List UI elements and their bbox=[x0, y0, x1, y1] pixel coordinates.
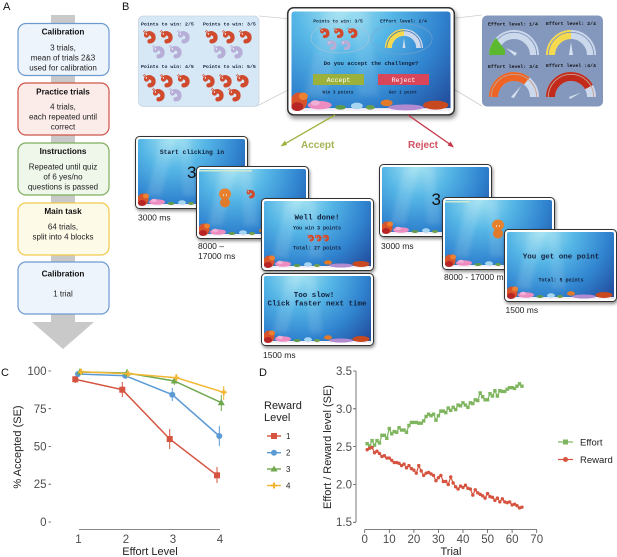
screen: well done: Well done! bbox=[294, 214, 340, 222]
box: calibration: mean of trials 2&3 bbox=[31, 54, 96, 62]
screen: start clicking: Start clicking in bbox=[160, 149, 224, 156]
x tick labels: 60 bbox=[506, 534, 518, 546]
effort series bbox=[367, 384, 522, 446]
panel label B: B bbox=[122, 1, 129, 13]
timing label: 3000 ms bbox=[381, 241, 414, 251]
legend: reward level: Level bbox=[264, 412, 290, 424]
x tick labels: 4 bbox=[217, 534, 224, 546]
highlighted gauge bbox=[371, 24, 432, 54]
y tick labels: 50 bbox=[34, 442, 46, 454]
panel: effort level gauges: Effort level: 2/4 bbox=[546, 21, 596, 27]
screen: countdown bbox=[380, 164, 492, 236]
screen: well done bbox=[262, 198, 374, 270]
x tick labels: 30 bbox=[432, 534, 445, 546]
box: instructions bbox=[18, 143, 109, 195]
panel: points to win options: Points to win: 3/5 bbox=[203, 22, 256, 28]
box: instructions: Repeated until quiz bbox=[29, 162, 97, 172]
y tick labels bbox=[336, 366, 352, 529]
accept arrow bbox=[280, 115, 335, 146]
x tick labels: 1 bbox=[75, 534, 82, 546]
series 4 yellow bbox=[78, 369, 227, 400]
gauge 4 bbox=[548, 74, 594, 99]
screen: well done: You win 3 points bbox=[293, 226, 341, 232]
chart C: percent accepted bbox=[12, 366, 302, 557]
x tick labels: 0 bbox=[361, 534, 368, 546]
x tick labels: 70 bbox=[530, 534, 543, 546]
x tick labels bbox=[361, 534, 543, 546]
purple shrimp icons bbox=[152, 30, 240, 99]
accept button bbox=[313, 74, 364, 85]
timing label: 8000 - 17000 ms bbox=[444, 272, 508, 282]
screen: clicking bbox=[196, 166, 308, 238]
panel: points to win options: Points to win: 5/5 bbox=[203, 64, 256, 70]
accept sequence bbox=[136, 136, 374, 360]
timing label bbox=[198, 241, 235, 261]
y axis title: % Accepted (SE) bbox=[12, 405, 24, 489]
zoom connector lines bbox=[257, 15, 482, 106]
y tick labels: 25 bbox=[34, 479, 46, 491]
timing label: 3000 ms bbox=[138, 212, 171, 222]
legend: reward level: 2 bbox=[286, 448, 291, 458]
axes bbox=[48, 371, 220, 530]
red shrimp icons bbox=[143, 30, 250, 99]
box: calibration: used for calibration bbox=[29, 64, 97, 72]
flow arrow bbox=[32, 15, 94, 349]
box: main task: Main task bbox=[44, 207, 82, 216]
panel label A: A bbox=[3, 1, 11, 13]
x tick labels: 20 bbox=[408, 534, 420, 546]
y tick labels: 3.0 bbox=[336, 404, 352, 416]
y tick labels: 0 bbox=[40, 517, 46, 529]
legend: effort and reward bbox=[558, 438, 613, 466]
panel A: flow chart bbox=[18, 15, 109, 349]
box: calibration: 3 trials, bbox=[50, 44, 76, 52]
series 3 green bbox=[76, 368, 225, 411]
x tick labels: 10 bbox=[383, 534, 396, 546]
box: main task: 64 trials, bbox=[48, 222, 78, 232]
chart D: effort and reward by trial bbox=[322, 366, 613, 557]
main decision screen: Effort level: 2/4 bbox=[380, 18, 427, 24]
screen: well done: Total: 27 points bbox=[293, 246, 341, 252]
main decision screen: Get 1 point bbox=[389, 90, 418, 96]
panel label C: C bbox=[1, 367, 9, 379]
screen: waiting bbox=[442, 198, 554, 270]
reject button bbox=[378, 74, 429, 85]
panel: effort level gauges bbox=[482, 16, 603, 106]
accept button: Accept bbox=[327, 77, 350, 84]
y tick labels: 75 bbox=[34, 404, 46, 416]
box: practice trials bbox=[18, 83, 109, 135]
screen: too slow bbox=[262, 274, 374, 346]
box: practice trials: each repeated until bbox=[29, 112, 97, 122]
y tick labels: 2.0 bbox=[336, 480, 352, 492]
y tick labels bbox=[27, 366, 46, 529]
series 2 blue bbox=[75, 371, 222, 446]
box: instructions: questions is passed bbox=[28, 182, 98, 192]
panel: effort level gauges: Effort level :4/4 bbox=[546, 63, 596, 69]
legend: effort and reward: Effort bbox=[580, 438, 603, 448]
box: final calibration: Calibration bbox=[42, 270, 84, 278]
box: instructions: Instructions bbox=[40, 147, 87, 156]
accept label: Accept bbox=[301, 140, 335, 151]
screen: start clicking: 3 bbox=[187, 163, 196, 182]
screen: countdown: 3 bbox=[432, 190, 441, 209]
y tick labels: 1.5 bbox=[336, 517, 352, 529]
box: instructions: of 6 yes/no bbox=[43, 172, 83, 182]
x tick labels bbox=[75, 534, 224, 546]
screen: too slow: Too slow! bbox=[294, 292, 334, 300]
box: final calibration bbox=[18, 262, 109, 314]
screen: too slow: Click faster next time bbox=[267, 300, 367, 308]
legend: reward level bbox=[264, 400, 302, 490]
legend: reward level: 4 bbox=[286, 482, 291, 490]
legend: reward level: 1 bbox=[286, 432, 291, 441]
panel: points to win options bbox=[138, 16, 259, 106]
box: calibration: Calibration bbox=[42, 28, 84, 36]
screen: start clicking bbox=[136, 136, 248, 208]
reject button: Reject bbox=[392, 77, 415, 84]
x tick labels: 2 bbox=[123, 534, 129, 546]
panel: effort level gauges: Effort level: 1/4 bbox=[488, 22, 538, 28]
panel: points to win options: Points to win: 4/5 bbox=[141, 64, 194, 70]
box: final calibration: 1 trial bbox=[53, 290, 73, 298]
legend: effort and reward: Reward bbox=[580, 455, 613, 466]
reject label: Reject bbox=[408, 140, 439, 151]
x tick labels: 3 bbox=[170, 534, 176, 546]
main decision screen: Points to win: 3/5 bbox=[313, 18, 363, 24]
panel label D: D bbox=[259, 367, 267, 379]
reject sequence bbox=[380, 164, 616, 315]
timing label: 1500 ms bbox=[506, 305, 538, 315]
timing label: 8000 – bbox=[198, 241, 224, 251]
reward series bbox=[367, 447, 522, 508]
box: main task bbox=[18, 203, 109, 255]
box: practice trials: Practice trials bbox=[36, 88, 90, 96]
y tick labels: 2.5 bbox=[336, 442, 352, 454]
gauge 3 bbox=[491, 74, 537, 98]
y axis title: Effort / Reward level (SE) bbox=[322, 385, 334, 509]
y tick labels: 3.5 bbox=[336, 366, 352, 378]
box: calibration bbox=[18, 24, 109, 76]
x tick labels: 40 bbox=[457, 534, 469, 546]
screen: one point: Total: 5 points bbox=[538, 278, 584, 284]
gauge 1 bbox=[489, 32, 537, 56]
series 1 red bbox=[72, 376, 220, 483]
axes bbox=[353, 371, 537, 533]
main decision screen: Win 3 points bbox=[323, 90, 354, 96]
box: practice trials: 4 trials, bbox=[50, 102, 76, 112]
timing label: 17000 ms bbox=[198, 251, 235, 261]
legend: reward level: Reward bbox=[264, 400, 302, 412]
x tick labels: 50 bbox=[481, 534, 494, 546]
screen: one point: You get one point bbox=[523, 254, 599, 262]
y tick labels: 100 bbox=[27, 366, 46, 378]
timing label: 1500 ms bbox=[263, 350, 296, 360]
legend: reward level: 3 bbox=[286, 465, 291, 474]
panel: points to win options: Points to win: 2/5 bbox=[141, 22, 194, 28]
box: practice trials: correct bbox=[51, 122, 76, 132]
highlighted shrimps bbox=[311, 23, 369, 53]
gauge 2 bbox=[548, 32, 594, 55]
screen: one point bbox=[504, 230, 616, 302]
reject arrow bbox=[408, 115, 454, 148]
panel: effort level gauges: Effort level: 3/4 bbox=[488, 64, 538, 70]
main decision screen: Do you accept the challenge? bbox=[324, 60, 419, 67]
box: main task: split into 4 blocks bbox=[33, 232, 93, 242]
main decision screen bbox=[288, 8, 454, 115]
